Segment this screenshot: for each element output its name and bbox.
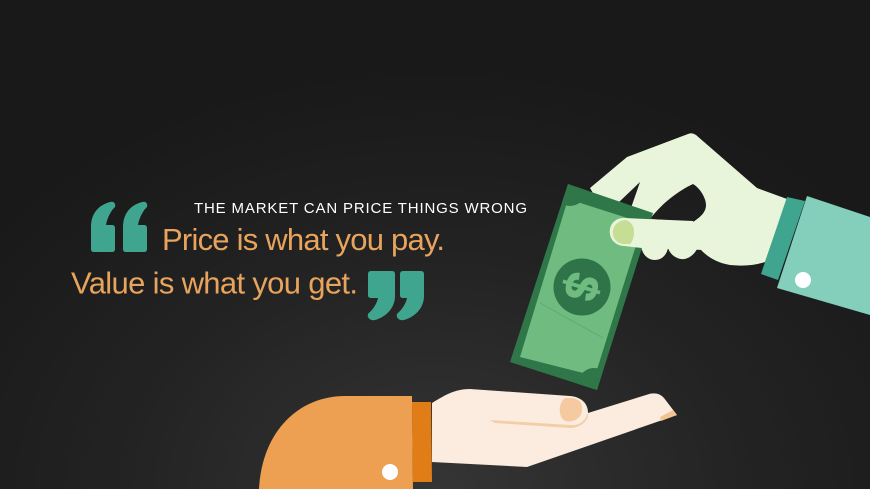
upper cuff — [761, 197, 805, 280]
upper palm and fingers — [590, 133, 787, 266]
thumb nail — [613, 220, 634, 244]
upper sleeve — [777, 196, 870, 315]
icon: opening quotation marks — [91, 202, 147, 252]
dollar medallion — [554, 258, 610, 316]
finger nail — [660, 410, 677, 421]
quote line 1: Price is what you pay. — [162, 222, 445, 257]
upper hand front — [610, 196, 870, 315]
dollar bill — [510, 174, 653, 400]
quote text — [71, 222, 445, 300]
thumb — [610, 218, 705, 250]
palm crease — [490, 413, 588, 428]
open palm — [432, 389, 677, 467]
upper sleeve button — [795, 272, 811, 288]
lower sleeve button — [382, 464, 398, 480]
dollar sign: $ — [553, 267, 611, 307]
infographic canvas — [71, 133, 870, 489]
quote line 2: Value is what you get. — [71, 266, 358, 300]
heading: THE MARKET CAN PRICE THINGS WRONG — [194, 200, 527, 217]
faint ghost word: Model — [449, 229, 514, 256]
thumb nail — [560, 398, 582, 422]
bill face — [520, 199, 643, 376]
lower hand — [259, 389, 677, 489]
icon: closing quotation marks — [368, 271, 424, 320]
bill border — [510, 184, 653, 390]
lower sleeve — [259, 396, 413, 489]
bill fold line — [540, 303, 603, 338]
lower cuff — [412, 402, 432, 482]
bill corner ornaments — [562, 184, 603, 390]
